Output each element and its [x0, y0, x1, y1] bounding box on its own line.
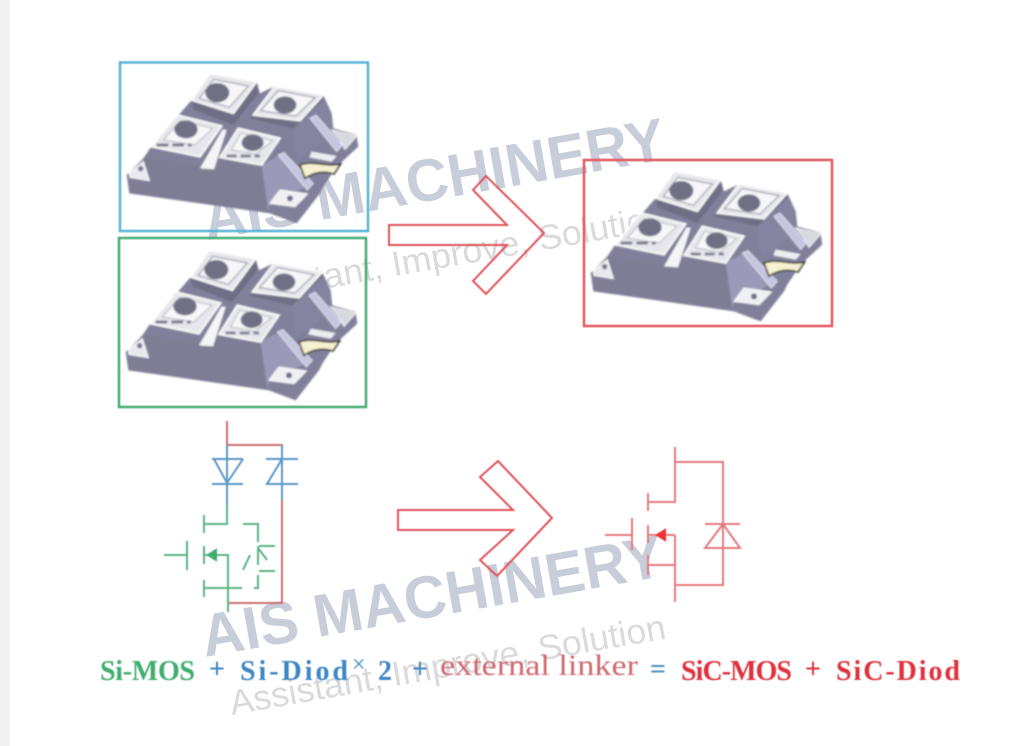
equation text: Si-Diod	[240, 656, 348, 687]
equation text: =	[650, 654, 666, 685]
panel: red SiC module box	[584, 160, 832, 326]
background edge strip	[0, 0, 10, 746]
watermark: lower tagline: Assistant, Improve, Solution	[227, 608, 669, 723]
panel: blue Si-MOS module box	[120, 62, 368, 231]
arrow: top	[389, 176, 544, 294]
watermark: lower AIS MACHINERY: AIS MACHINERY	[196, 523, 668, 670]
icon: SiC module	[591, 171, 822, 321]
icon: module middle	[126, 250, 357, 400]
icon: module top	[127, 73, 358, 223]
equation text: SiC-MOS	[681, 656, 792, 687]
equation text: +	[805, 654, 821, 685]
watermark: upper AIS MACHINERY: AIS MACHINERY	[198, 106, 670, 253]
equation text: Si-MOS	[100, 656, 195, 687]
equation text: external linker	[440, 649, 638, 682]
panel: green Si-Diode module box	[119, 238, 366, 407]
equation text: ×	[352, 652, 366, 678]
watermark: upper tagline: Assistant, Improve, Solution	[227, 198, 669, 313]
circuit: Si-MOS with two Si diodes	[164, 421, 298, 612]
circuit: SiC-MOS with SiC diode	[605, 447, 740, 602]
equation text: +	[209, 654, 225, 685]
equation text: +	[412, 654, 428, 685]
arrow: bottom	[398, 461, 552, 576]
equation text	[100, 649, 960, 687]
equation text: SiC-Diod	[836, 656, 960, 687]
equation text: 2	[378, 656, 392, 687]
